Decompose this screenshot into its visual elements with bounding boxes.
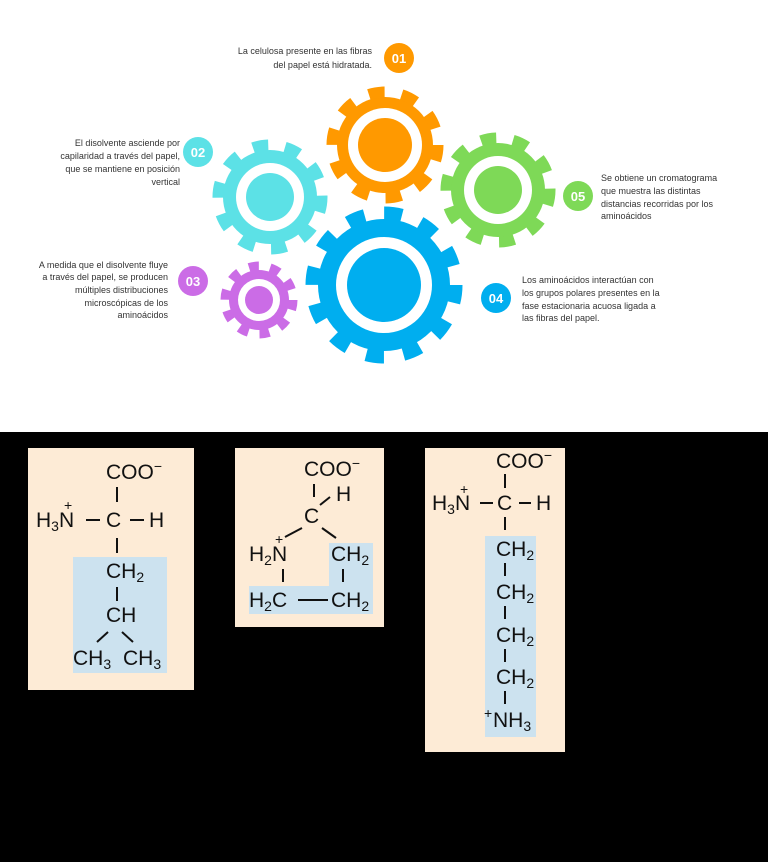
badge 02: 02 bbox=[191, 145, 205, 160]
badge 04: 04 bbox=[489, 291, 504, 306]
text 05: que muestra las distintas bbox=[601, 186, 701, 196]
panel: lysine: H bbox=[432, 492, 447, 515]
panel: lysine bbox=[425, 447, 565, 752]
text 04: fase estacionaria acuosa ligada a bbox=[522, 301, 656, 311]
panel: leucine: C bbox=[106, 509, 121, 532]
text 03: aminoácidos bbox=[117, 310, 168, 320]
panel: leucine: 3 bbox=[153, 656, 161, 672]
badge 03 bbox=[178, 266, 208, 296]
panel: proline: 2 bbox=[361, 552, 369, 568]
text 01: del papel está hidratada. bbox=[273, 60, 372, 70]
badge 05: 05 bbox=[571, 189, 585, 204]
gear: orange bbox=[332, 92, 438, 198]
badge 01: 01 bbox=[392, 51, 406, 66]
badge 04 bbox=[481, 283, 511, 313]
badge 05 bbox=[563, 181, 593, 211]
panel: proline: 2 bbox=[264, 598, 272, 614]
text 05: Se obtiene un cromatograma bbox=[601, 173, 717, 183]
panel: proline: C bbox=[272, 589, 287, 612]
panel: proline bbox=[235, 448, 384, 627]
text 02: El disolvente asciende por bbox=[75, 138, 180, 148]
text 03: A medida que el disolvente fluye bbox=[39, 260, 168, 270]
text 03: microscópicas de los bbox=[84, 298, 168, 308]
panel: proline: − bbox=[352, 455, 360, 471]
gear: cyan bbox=[218, 145, 322, 249]
panel: lysine: 2 bbox=[526, 547, 534, 563]
text 04: Los aminoácidos interactúan con bbox=[522, 275, 654, 285]
text 05: aminoácidos bbox=[601, 211, 652, 221]
panel: proline: 2 bbox=[264, 552, 272, 568]
panel: proline: H bbox=[336, 483, 351, 506]
panel: lysine: 3 bbox=[447, 501, 455, 517]
text 04: los grupos polares presentes en la bbox=[522, 288, 660, 298]
panel: leucine: 3 bbox=[103, 656, 111, 672]
panel: lysine: CH bbox=[496, 538, 526, 561]
panel: leucine: + bbox=[64, 497, 72, 513]
text 01: La celulosa presente en las fibras bbox=[238, 46, 372, 56]
black background bbox=[0, 432, 768, 862]
panel: leucine: CH bbox=[123, 647, 153, 670]
badge 03: 03 bbox=[186, 274, 200, 289]
text 04: las fibras del papel. bbox=[522, 313, 600, 323]
panel: lysine: 3 bbox=[523, 718, 531, 734]
panel: lysine: C bbox=[497, 492, 512, 515]
panel: proline: COO bbox=[304, 458, 352, 481]
panel: lysine: NH bbox=[493, 709, 523, 732]
panel: leucine: CH bbox=[106, 604, 136, 627]
panel: leucine: CH bbox=[106, 560, 136, 583]
badge 01 bbox=[384, 43, 414, 73]
panel: lysine: CH bbox=[496, 581, 526, 604]
panel: leucine: COO bbox=[106, 461, 154, 484]
panel: leucine: 3 bbox=[51, 518, 59, 534]
panel: proline: H bbox=[249, 589, 264, 612]
panel: lysine: + bbox=[460, 481, 468, 497]
text 03: a través del papel, se producen bbox=[42, 272, 168, 282]
text 02: capilaridad a través del papel, bbox=[60, 151, 180, 161]
gear: green bbox=[446, 138, 550, 242]
panel: proline: CH bbox=[331, 589, 361, 612]
panel: proline: CH bbox=[331, 543, 361, 566]
panel: proline: + bbox=[275, 531, 283, 547]
panel: proline: H bbox=[249, 543, 264, 566]
panel: lysine: N bbox=[455, 492, 470, 515]
panel: lysine: COO bbox=[496, 450, 544, 473]
panel: proline: C bbox=[304, 505, 319, 528]
panel: proline: N bbox=[272, 543, 287, 566]
panel: lysine: CH bbox=[496, 624, 526, 647]
panel: lysine: CH bbox=[496, 666, 526, 689]
panel: leucine: − bbox=[154, 458, 162, 474]
panel: lysine: 2 bbox=[526, 590, 534, 606]
text 03: múltiples distribuciones bbox=[75, 285, 168, 295]
panel: proline: 2 bbox=[361, 598, 369, 614]
panel: leucine bbox=[28, 448, 194, 690]
text 02: que se mantiene en posición bbox=[65, 164, 180, 174]
gear: blue bbox=[312, 213, 456, 357]
panel: lysine: − bbox=[544, 447, 552, 463]
panel: leucine: 2 bbox=[136, 569, 144, 585]
panel: leucine: H bbox=[36, 509, 51, 532]
text 02: vertical bbox=[151, 177, 180, 187]
panel: lysine: 2 bbox=[526, 675, 534, 691]
panel: leucine: H bbox=[149, 509, 164, 532]
gear: purple bbox=[225, 266, 293, 334]
text 05: distancias recorridas por los bbox=[601, 199, 714, 209]
badge 02 bbox=[183, 137, 213, 167]
panel: leucine: CH bbox=[73, 647, 103, 670]
panel: lysine: + bbox=[484, 705, 492, 721]
panel: lysine: H bbox=[536, 492, 551, 515]
panel: lysine: 2 bbox=[526, 633, 534, 649]
panel: leucine: N bbox=[59, 509, 74, 532]
